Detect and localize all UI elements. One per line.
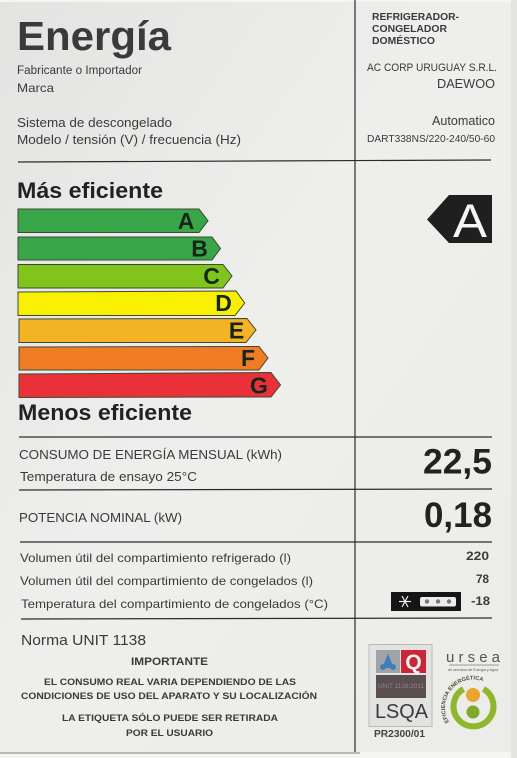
heading: más eficiente: Más eficiente bbox=[17, 178, 163, 203]
volume and temperature rows: Temperatura del compartimiento de congelados (°C) bbox=[21, 597, 328, 611]
volume and temperature rows: 220 bbox=[466, 549, 489, 563]
bar A bbox=[18, 208, 208, 234]
heading: menos eficiente: Menos eficiente bbox=[18, 400, 192, 425]
left header labels bbox=[17, 65, 241, 147]
monthly energy consumption row bbox=[19, 442, 492, 484]
logo: LSQA certification: UNIT 1138:2011 bbox=[378, 683, 424, 690]
standard reference: Norma UNIT 1138 bbox=[21, 632, 146, 649]
logo: ursea: ursea bbox=[446, 649, 501, 666]
bar E bbox=[19, 318, 256, 344]
bar F: F bbox=[241, 345, 255, 371]
bar B bbox=[18, 236, 220, 262]
appliance type heading: CONGELADOR bbox=[372, 24, 448, 35]
bar E: E bbox=[229, 318, 244, 344]
energy class bars bbox=[18, 208, 280, 398]
rating badge A: A bbox=[453, 194, 488, 247]
nominal power row: POTENCIA NOMINAL (kW) bbox=[19, 511, 182, 525]
volume and temperature rows: -18 bbox=[471, 594, 490, 608]
bar F bbox=[19, 345, 268, 371]
important notice: IMPORTANTE bbox=[131, 656, 208, 668]
logo: LSQA certification: LSQA bbox=[375, 701, 429, 723]
volume and temperature rows: Volumen útil del compartimiento de congelados (l) bbox=[20, 574, 313, 588]
right header values bbox=[367, 62, 497, 145]
monthly energy consumption row: Temperatura de ensayo 25°C bbox=[20, 470, 197, 484]
bar G bbox=[19, 372, 280, 398]
appliance type heading bbox=[372, 12, 459, 47]
volume and temperature rows: 78 bbox=[476, 572, 489, 586]
logo: LSQA certification bbox=[369, 644, 432, 726]
left header labels: Sistema de descongelado bbox=[17, 115, 172, 130]
certificate number: PR2300/01 bbox=[374, 729, 425, 740]
monthly energy consumption row: CONSUMO DE ENERGÍA MENSUAL (kWh) bbox=[19, 447, 282, 462]
right header values: DART338NS/220-240/50-60 bbox=[367, 133, 495, 145]
important notice: POR EL USUARIO bbox=[126, 728, 213, 739]
rating badge A bbox=[427, 194, 492, 247]
volume and temperature rows: Volumen útil del compartimiento refrigerado (l) bbox=[20, 551, 291, 565]
appliance type heading: DOMÉSTICO bbox=[372, 34, 435, 47]
appliance type heading: REFRIGERADOR- bbox=[372, 12, 459, 23]
right header values: AC CORP URUGUAY S.R.L. bbox=[367, 62, 497, 74]
logo: ursea: de servicios de Energía y Agua bbox=[448, 668, 498, 672]
bar C: C bbox=[203, 263, 220, 289]
logo: eficiencia energética bbox=[441, 675, 497, 730]
important notice: EL CONSUMO REAL VARIA DEPENDIENDO DE LAS bbox=[44, 677, 296, 688]
right header values: Automatico bbox=[432, 114, 495, 128]
important notice bbox=[21, 656, 317, 739]
bar C bbox=[18, 263, 232, 289]
nominal power row: 0,18 bbox=[424, 496, 492, 535]
nominal power row bbox=[19, 496, 492, 535]
monthly energy consumption row: 22,5 bbox=[423, 442, 492, 482]
bar D: D bbox=[215, 290, 232, 316]
left header labels: Fabricante o Importador bbox=[17, 65, 142, 77]
logo: eficiencia energética: EFICIENCIA ENERGÉTICA bbox=[441, 675, 483, 724]
bar D bbox=[18, 290, 245, 316]
bar G: G bbox=[250, 372, 268, 398]
bar A: A bbox=[178, 208, 194, 234]
important notice: CONDICIONES DE USO DEL APARATO Y SU LOCALIZACIÓN bbox=[21, 690, 317, 702]
volume and temperature rows bbox=[20, 549, 490, 611]
title: Energía bbox=[17, 13, 172, 59]
logo: LSQA certification: Q bbox=[405, 651, 422, 674]
right header values: DAEWOO bbox=[437, 77, 495, 91]
important notice: LA ETIQUETA SÓLO PUEDE SER RETIRADA bbox=[62, 712, 278, 724]
icon: freezer stars bbox=[391, 592, 461, 611]
left header labels: Modelo / tensión (V) / frecuencia (Hz) bbox=[17, 132, 241, 147]
left header labels: Marca bbox=[17, 81, 54, 95]
bar B: B bbox=[191, 236, 208, 262]
